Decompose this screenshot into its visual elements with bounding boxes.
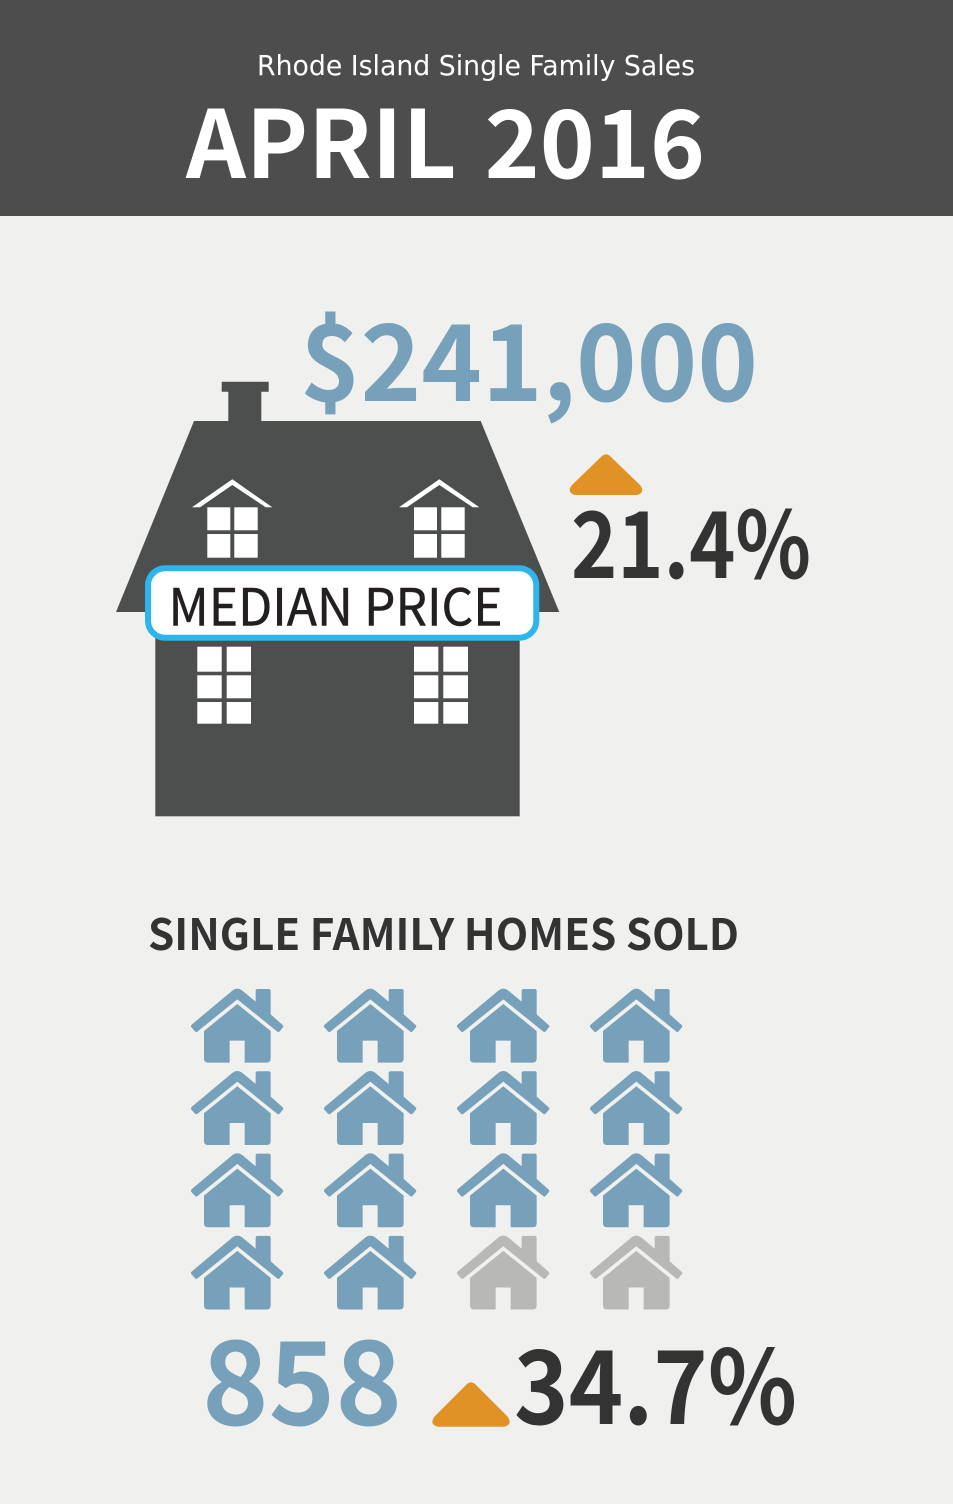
pictogram: homes sold (191, 989, 682, 1310)
subtitle: Rhode Island Single Family Sales (257, 49, 695, 82)
homes sold change: 34.7% (514, 1307, 797, 1454)
lower window right (414, 647, 468, 724)
dormer window left (192, 479, 272, 558)
median price change: 21.4% (571, 472, 811, 605)
icon: orange up arrow, homes sold (432, 1382, 510, 1427)
title: APRIL 2016 (185, 70, 705, 206)
roof (116, 421, 559, 612)
median price label: MEDIAN PRICE (168, 566, 502, 640)
dormer window right (399, 479, 479, 558)
house body (155, 600, 520, 816)
icon: large house (116, 382, 559, 816)
median price value: $241,000 (300, 278, 758, 432)
homes sold heading: SINGLE FAMILY HOMES SOLD (148, 901, 739, 963)
homes sold value: 858 (202, 1291, 402, 1459)
chimney (222, 382, 269, 425)
header banner (0, 0, 953, 216)
icon: orange up arrow, median price (570, 454, 642, 495)
lower window left (197, 647, 251, 724)
